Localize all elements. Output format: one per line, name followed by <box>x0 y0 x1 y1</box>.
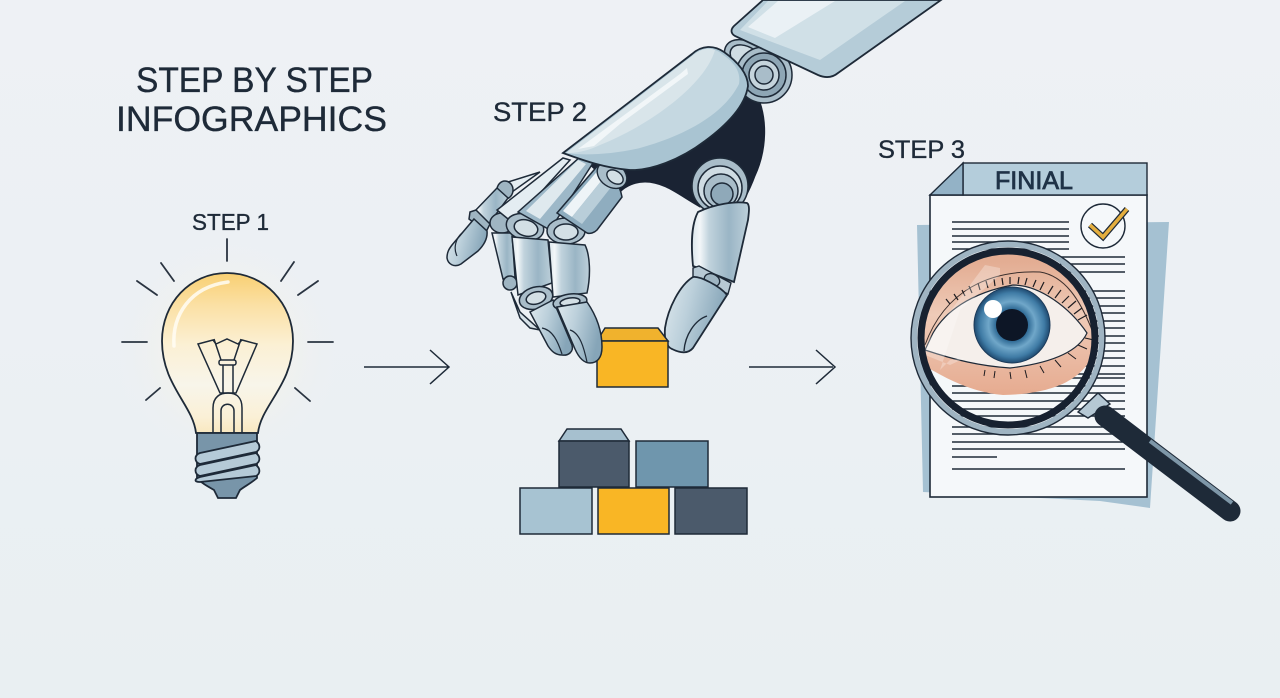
knuckle joints <box>592 156 632 194</box>
eye white <box>925 285 1087 368</box>
lens glare <box>925 265 1000 370</box>
title <box>116 61 387 139</box>
dark palm <box>590 82 765 207</box>
catchlight <box>984 300 1002 318</box>
approval check badge <box>1081 204 1127 248</box>
magnifying glass ring <box>911 241 1105 435</box>
robot forearm <box>732 0 941 77</box>
thumb knuckle <box>693 266 731 294</box>
title: INFOGRAPHICS <box>116 100 387 139</box>
title: STEP BY STEP <box>136 61 373 100</box>
upper lid crease <box>925 272 1092 345</box>
icon: filament <box>198 339 257 433</box>
thumb upper segment <box>692 202 749 282</box>
document header <box>930 163 1147 195</box>
middle finger <box>503 157 593 355</box>
document page <box>930 195 1147 497</box>
iris <box>974 287 1050 363</box>
step 1: light bulb <box>112 209 342 498</box>
magnifying glass handle <box>1078 393 1232 511</box>
icon: glow <box>112 235 342 465</box>
light bottom block <box>520 488 592 534</box>
pupil <box>996 309 1028 341</box>
step 3 label: STEP 3 <box>878 136 965 164</box>
wrist joint <box>717 31 792 103</box>
infographic canvas <box>119 0 1240 535</box>
eyelid and skin <box>924 254 1092 395</box>
ring finger <box>490 158 570 330</box>
thumb tip <box>665 277 727 352</box>
index finger <box>547 163 622 363</box>
step 2 label: STEP 2 <box>493 97 587 127</box>
yellow block held by hand <box>597 328 668 387</box>
thumb joint <box>692 158 748 214</box>
text lines <box>952 222 1125 469</box>
icon: bulb screw base <box>196 433 259 498</box>
lower lashes <box>984 338 1094 379</box>
block pile <box>520 429 747 534</box>
little finger <box>447 172 540 266</box>
arrow: step 2 to step 3 <box>749 350 835 384</box>
header text: FINIAL <box>995 167 1073 195</box>
icon: bulb highlight <box>174 282 228 346</box>
document shadow sheet <box>917 222 1169 508</box>
upper lashes <box>946 277 1087 320</box>
eye seen through the lens <box>924 254 1092 395</box>
yellow bottom block <box>598 488 669 534</box>
dark top block <box>559 429 629 487</box>
icon: light rays <box>122 239 333 401</box>
steel top block <box>636 441 708 487</box>
step 3: reviewed document <box>878 136 1232 511</box>
step 1 label: STEP 1 <box>192 209 269 235</box>
back of hand <box>563 47 748 170</box>
dark bottom block <box>675 488 747 534</box>
icon: bulb glass <box>162 273 293 433</box>
thumb nail <box>684 316 707 351</box>
arrow: step 1 to step 2 <box>364 350 449 384</box>
step 2: robot hand and blocks <box>447 0 941 534</box>
